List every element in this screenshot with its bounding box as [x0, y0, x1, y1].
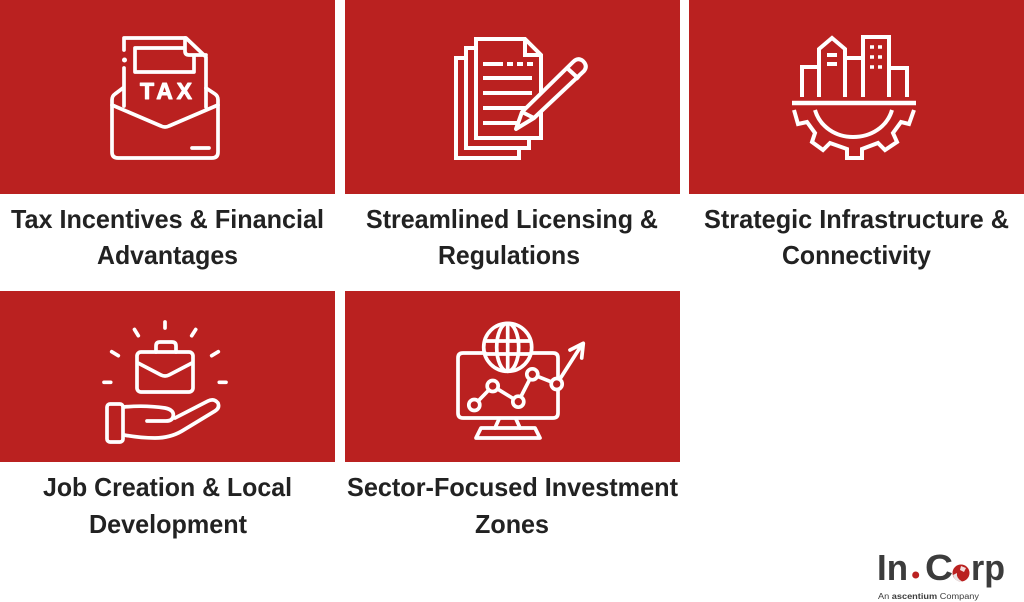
panel: strategic infrastructure: [689, 0, 1024, 270]
icon: tax envelope: TAX: [140, 78, 193, 104]
label: sector-focused zones: Sector-Focused Investment: [347, 472, 678, 502]
icon: hand with briefcase: [104, 322, 226, 442]
label: job creation: Development: [89, 509, 247, 539]
panel background: [689, 0, 1024, 194]
label: job creation: [43, 472, 292, 539]
label: strategic infrastructure: Connectivity: [782, 240, 932, 270]
label: strategic infrastructure: Strategic Infrastructure &: [704, 204, 1009, 234]
panel background: [0, 0, 335, 194]
logo wordmark: In: In: [877, 547, 908, 588]
logo wordmark: rp: rp: [971, 547, 1005, 588]
logo red dot: [912, 572, 919, 578]
label: tax incentives: Tax Incentives & Financial: [11, 204, 324, 234]
panel background: [345, 291, 680, 462]
panel: job creation: [0, 291, 335, 539]
label: sector-focused zones: Zones: [475, 509, 549, 539]
label: streamlined licensing: [366, 204, 658, 270]
panel background: [345, 0, 680, 194]
label: tax incentives: [11, 204, 324, 270]
logo wordmark: C: C: [925, 547, 953, 588]
panel background: [0, 291, 335, 462]
logo tagline: An ascentium Company: [878, 592, 979, 601]
icon: tax envelope: [112, 38, 218, 158]
icon: documents and pencil: [456, 39, 586, 158]
icon: city on gear: [792, 37, 916, 158]
panel: streamlined licensing: [345, 0, 680, 270]
label: sector-focused zones: [347, 472, 678, 539]
label: strategic infrastructure: [704, 204, 1009, 270]
icon: monitor with globe and growth chart: [458, 323, 583, 438]
label: streamlined licensing: Streamlined Licensing &: [366, 204, 658, 234]
label: tax incentives: Advantages: [97, 240, 238, 270]
label: streamlined licensing: Regulations: [438, 240, 580, 270]
panel: sector-focused zones: [345, 291, 680, 539]
logo: InCorp: [877, 547, 1005, 601]
label: job creation: Job Creation & Local: [43, 472, 292, 502]
logo globe: [952, 564, 970, 582]
panel: tax incentives: [0, 0, 335, 270]
